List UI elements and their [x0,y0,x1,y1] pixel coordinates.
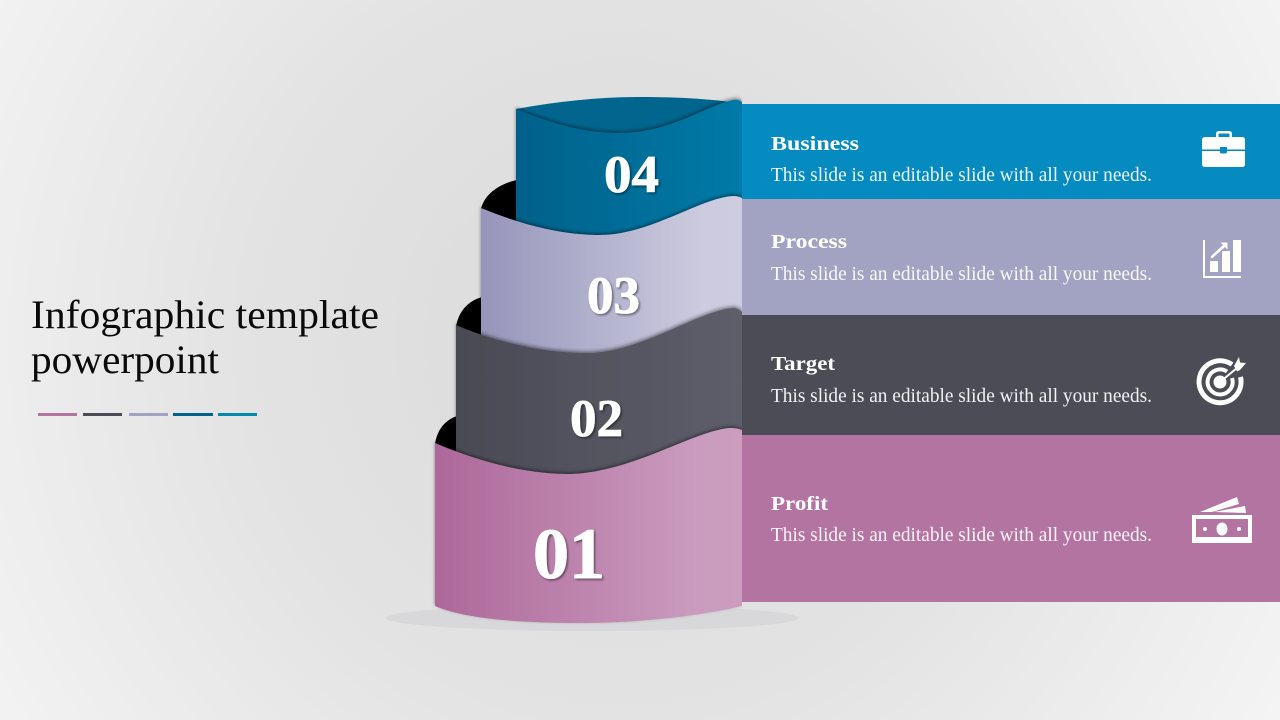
tier 02 number: 02 [570,390,623,448]
panel: process [742,199,1280,315]
tier 01 number: 01 [533,514,605,594]
profit heading: Profit [771,493,828,515]
tier 04 number: 04 [604,146,659,204]
icon: banknotes [1192,497,1252,543]
tier 02 [454,304,742,474]
tier back: black inner rims [435,180,517,470]
tier 03 number: 03 [587,267,640,325]
tier 03 body [478,192,742,353]
colour dashes under title [38,413,257,416]
title: powerpoint [31,337,219,382]
panel: business [742,104,1280,199]
tier 04 back rim [516,97,727,133]
icon: target with arrow [1199,357,1246,403]
business description: This slide is an editable slide with all your needs. [771,164,1152,186]
process description: This slide is an editable slide with all your needs. [771,263,1152,285]
title: Infographic template [31,292,379,337]
panel: profit [742,435,1280,602]
tier 01 body [435,428,742,623]
tier 04 body [514,96,742,235]
tier 02 body [454,304,742,474]
title [31,292,379,382]
profit description: This slide is an editable slide with all your needs. [771,524,1152,546]
tier 03 [478,192,742,353]
stack ground shadow [386,605,798,631]
target description: This slide is an editable slide with all your needs. [771,385,1152,407]
icon: growth chart [1203,240,1241,278]
business heading: Business [771,133,859,155]
icon: briefcase [1202,131,1245,167]
tier 04 [514,96,742,235]
target heading: Target [771,353,835,375]
process heading: Process [771,231,847,253]
panel: target [742,315,1280,435]
tier 01 [435,428,742,623]
